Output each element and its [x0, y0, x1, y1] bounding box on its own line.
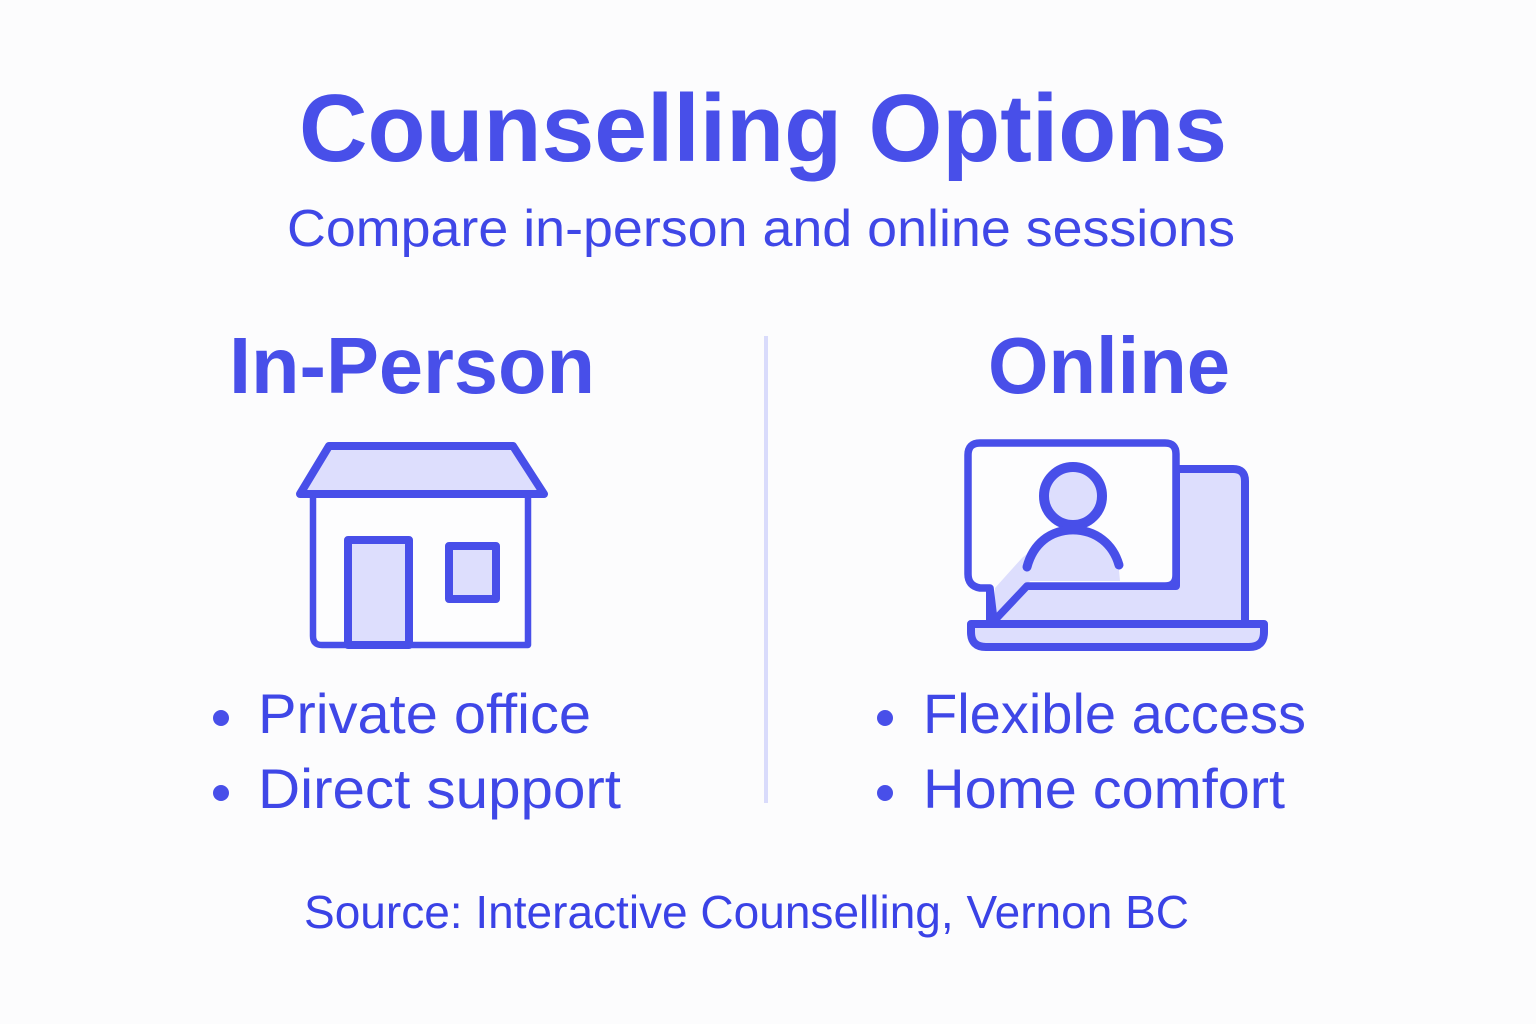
bullet list: online: Home comfort [923, 757, 1285, 820]
bullet list: online [877, 682, 1306, 820]
title: Counselling Options [299, 75, 1227, 182]
bullet list: in-person: Private office [258, 682, 591, 745]
panel: online [877, 321, 1306, 820]
heading: online: Online [988, 321, 1230, 410]
icon: laptop with video call bubble [968, 443, 1264, 647]
bullet list: in-person: Direct support [258, 757, 621, 820]
bullet list: in-person [213, 682, 621, 820]
panel: in-person [213, 321, 621, 820]
bullet list: online: Flexible access [923, 682, 1306, 745]
subtitle: Compare in-person and online sessions [287, 200, 1235, 258]
source note: Source: Interactive Counselling, Vernon BC [304, 886, 1189, 938]
icon: house [300, 446, 544, 645]
heading: in-person: In-Person [229, 321, 595, 410]
